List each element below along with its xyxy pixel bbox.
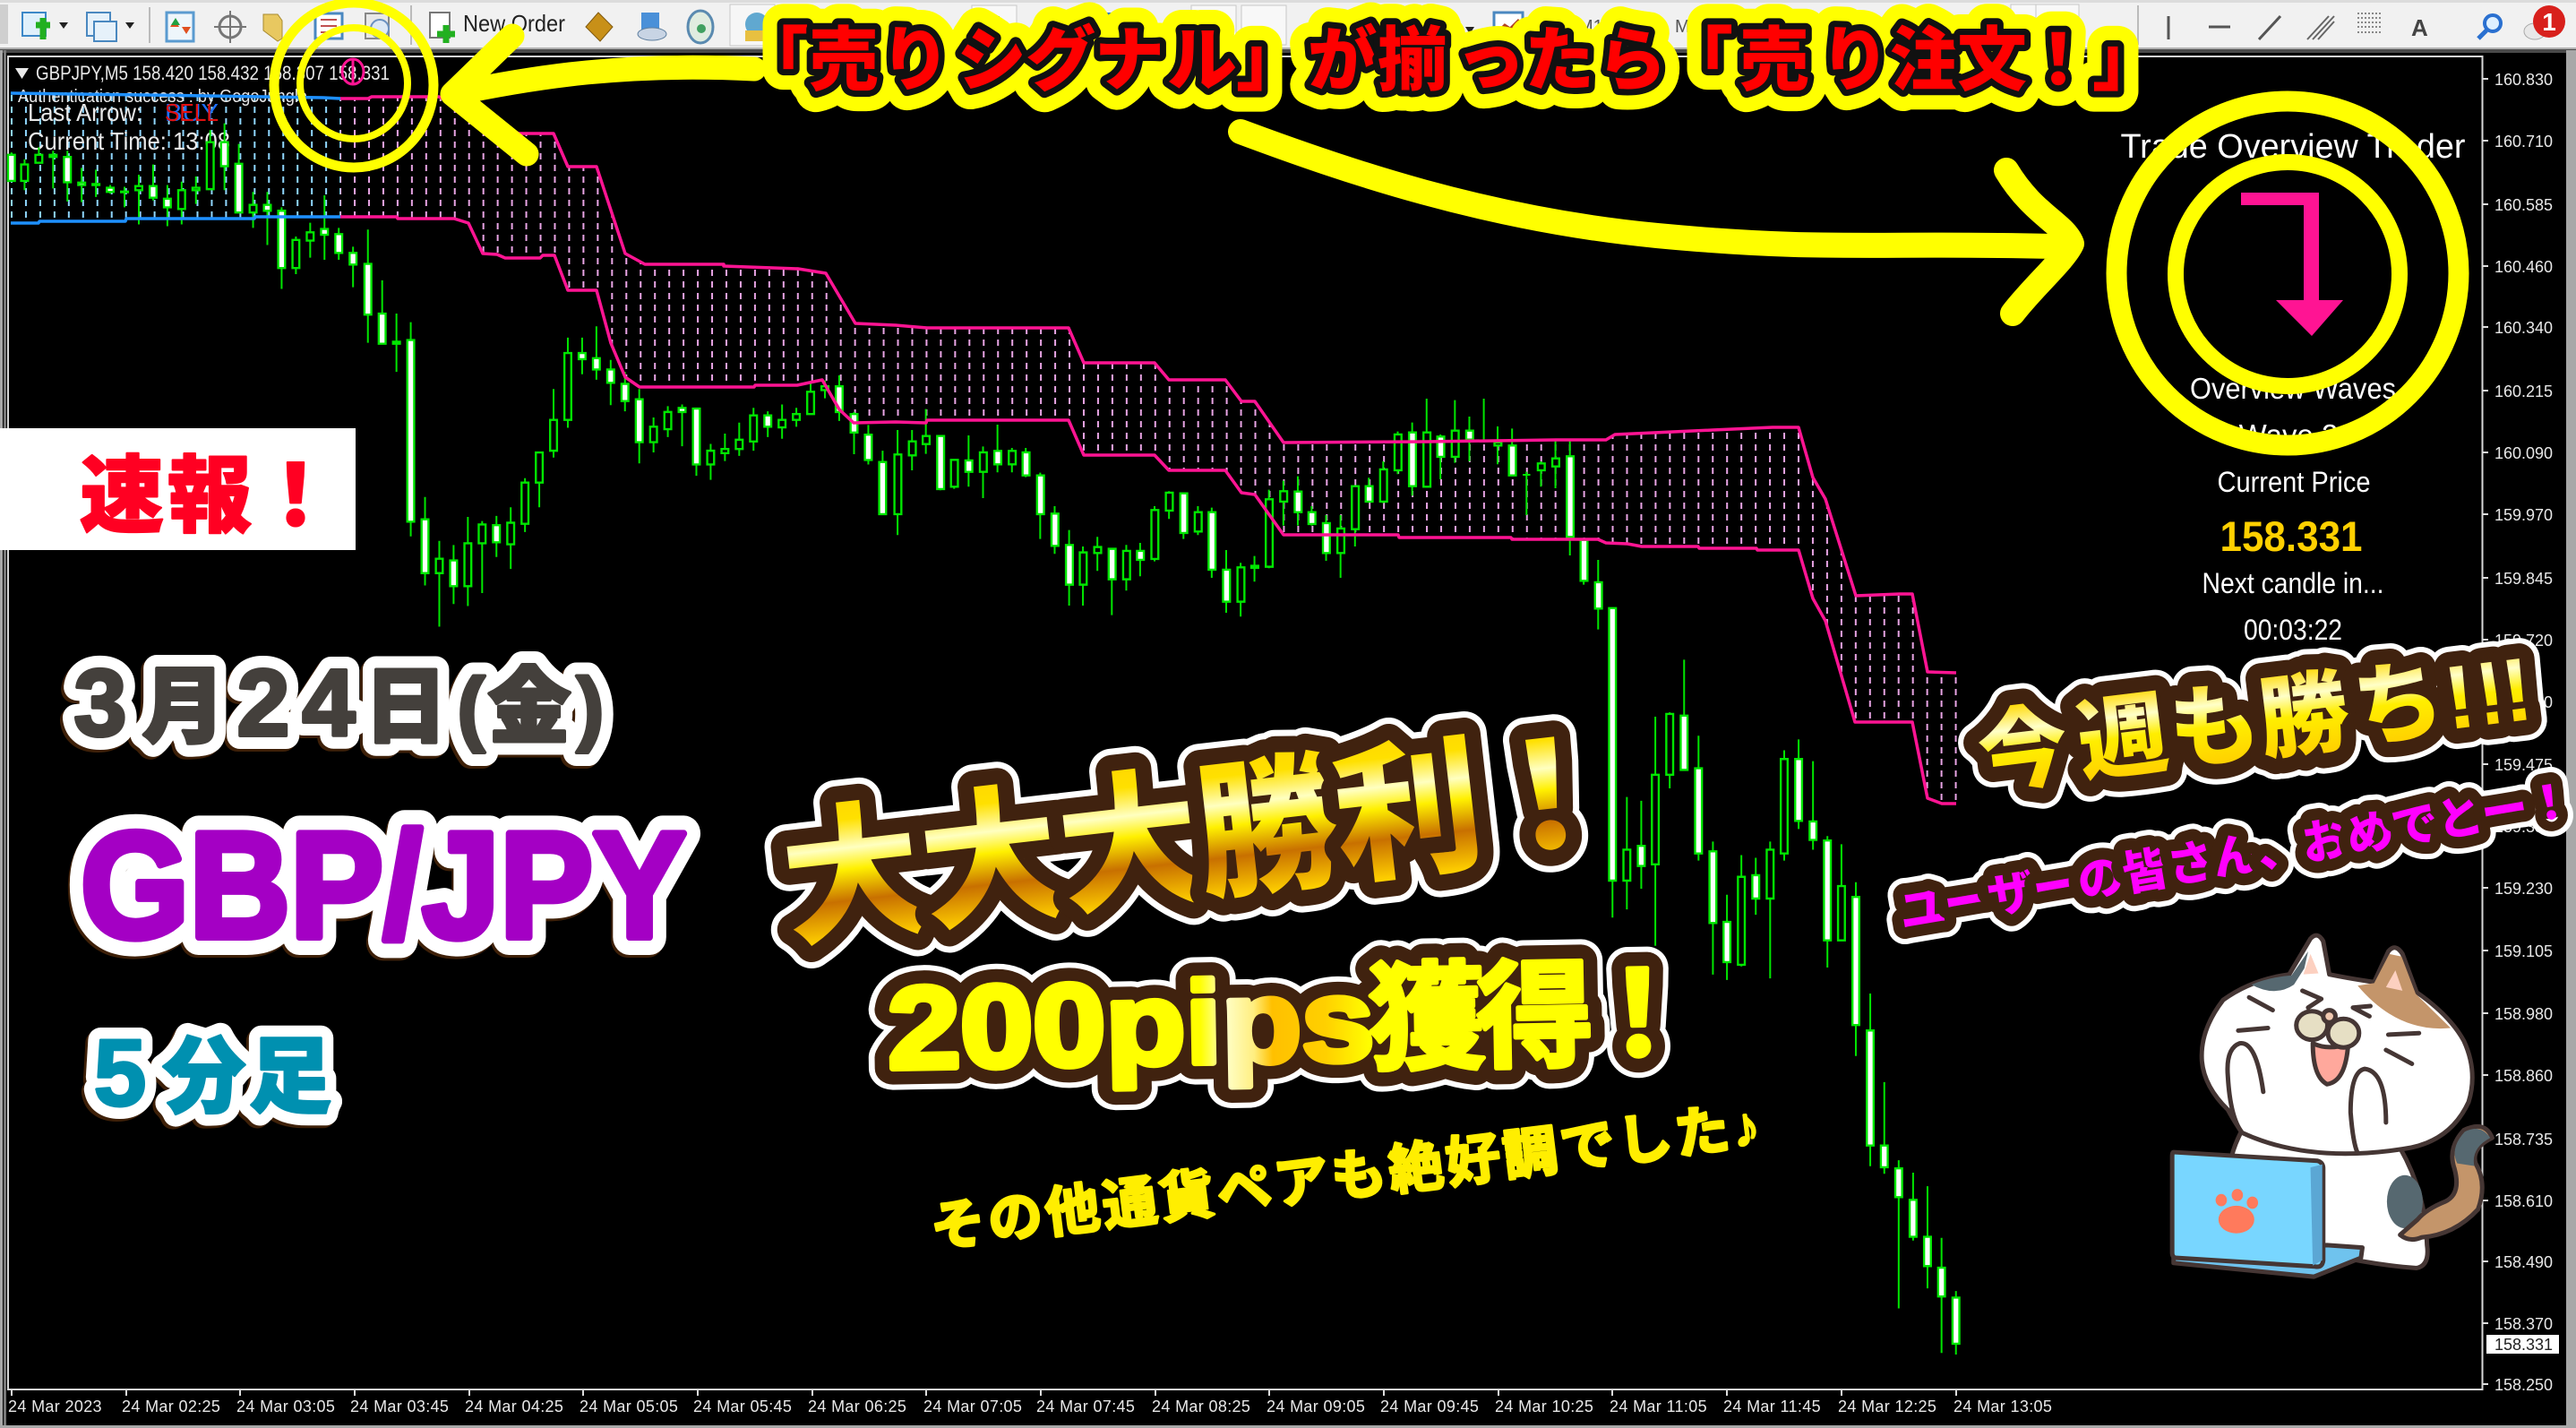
price axis: 159.970 <box>2494 506 2553 524</box>
chart status text <box>15 62 390 155</box>
platform toolbar: M15 <box>1578 17 1613 37</box>
timeframe heading: 5分足 <box>91 1023 329 1129</box>
price axis: 158.735 <box>2494 1131 2553 1148</box>
price axis: 159.230 <box>2494 880 2553 898</box>
price axis: 159.475 <box>2494 756 2553 774</box>
pips headline: 200pips <box>887 954 1375 1094</box>
time axis: 24 Mar 03:45 <box>350 1398 449 1415</box>
date heading: 3月24日(金) <box>74 650 604 756</box>
overview panel text: Wave 2 <box>2239 418 2338 452</box>
big win headline: 大大大勝利！ <box>774 707 1629 966</box>
cat head <box>2202 935 2472 1154</box>
price axis: 160.215 <box>2494 383 2553 400</box>
price axis: 160.340 <box>2494 319 2553 337</box>
price axis: 159.105 <box>2494 942 2553 960</box>
overview panel text: 00:03:22 <box>2244 614 2342 646</box>
arrow to overview panel <box>1241 132 2072 314</box>
price axis: 158.250 <box>2494 1376 2553 1394</box>
time axis: 24 Mar 11:45 <box>1723 1398 1821 1415</box>
overview panel text: Trade Overview Trader <box>2121 128 2466 166</box>
cat face <box>2228 991 2419 1153</box>
breaking news label <box>0 428 356 550</box>
overview panel text <box>2121 128 2466 646</box>
big win headline: 大大大勝利！ <box>774 707 1629 966</box>
this week win headline: 今週も勝ち!!! <box>1972 639 2537 806</box>
time axis: 24 Mar 07:05 <box>923 1398 1022 1415</box>
chart status text: SELL <box>165 99 219 126</box>
price axis: 159.720 <box>2494 632 2553 649</box>
price axis: 158.331 <box>2494 1336 2553 1354</box>
timeframe heading: 5分足 <box>94 1020 331 1126</box>
cat with laptop <box>2172 935 2492 1277</box>
time axis: 24 Mar 06:25 <box>808 1398 906 1415</box>
time axis: 24 Mar 05:05 <box>580 1398 678 1415</box>
other pairs caption: その他通貨ペアも絶好調でした♪ <box>927 1095 1763 1259</box>
time axis: 24 Mar 09:05 <box>1267 1398 1365 1415</box>
price axis <box>2483 71 2559 1394</box>
overview panel text: Current Price <box>2218 466 2370 498</box>
currency pair heading: GBP/JPY <box>81 801 686 969</box>
pink down arrow icon <box>2241 193 2343 336</box>
pips headline: 獲得！ <box>1368 949 1697 1085</box>
price axis: 158.490 <box>2494 1253 2553 1271</box>
chart status text: Current Time: 13:08 <box>28 127 230 155</box>
time axis: 24 Mar 03:05 <box>236 1398 335 1415</box>
time axis: 24 Mar 11:05 <box>1610 1398 1707 1415</box>
pips headline: 200pips <box>887 954 1375 1094</box>
laptop <box>2174 1245 2362 1277</box>
chart status text: BUY <box>165 99 219 126</box>
cat tail <box>2400 1126 2492 1240</box>
price axis: 160.460 <box>2494 258 2553 276</box>
candlesticks <box>8 124 1960 1355</box>
this week win headline: 今週も勝ち!!! <box>1972 639 2537 806</box>
time axis: 24 Mar 10:25 <box>1495 1398 1593 1415</box>
time axis: 24 Mar 05:45 <box>693 1398 792 1415</box>
top headline: 「売りシグナル」が揃ったら「売り注文！」 <box>739 21 2162 99</box>
pips headline: 獲得！ <box>1368 949 1697 1085</box>
platform toolbar: A <box>2411 14 2428 41</box>
overview panel text: Next candle in... <box>2202 567 2384 599</box>
yellow rings around chart signal <box>274 3 434 168</box>
cloud boundary lines <box>11 93 1956 804</box>
price axis: 159.350 <box>2494 818 2553 836</box>
cat body <box>2230 1131 2427 1268</box>
time axis: 24 Mar 13:05 <box>1953 1398 2052 1415</box>
pips headline: 200pips <box>887 954 1375 1094</box>
price axis: 159.600 <box>2494 693 2553 711</box>
price axis: 160.090 <box>2494 444 2553 462</box>
overview panel text: 158.331 <box>2220 512 2363 560</box>
time axis <box>8 1390 2052 1415</box>
price axis: 158.370 <box>2494 1315 2553 1333</box>
sell arrow signal on chart <box>342 59 364 84</box>
platform toolbar: 1 <box>2542 8 2556 36</box>
currency pair heading: GBP/JPY <box>81 801 686 969</box>
breaking news label: 速報！ <box>80 449 338 543</box>
congratulations line: ユーザーの皆さん、おめでとー！ <box>1895 774 2576 940</box>
paw print <box>2216 1189 2258 1234</box>
cloud hatching <box>11 93 1958 804</box>
chart status text: Last Arrow: <box>28 99 142 126</box>
price axis: 158.980 <box>2494 1005 2553 1023</box>
overview panel text: Overview Waves <box>2190 372 2396 405</box>
time axis: 24 Mar 08:25 <box>1152 1398 1250 1415</box>
timeframe heading: 5分足 <box>94 1020 331 1126</box>
New Order button label: New Order <box>463 10 565 37</box>
chart status text: GBPJPY,M5 158.420 158.432 158.307 158.331 <box>36 62 390 84</box>
price axis: 160.710 <box>2494 133 2553 151</box>
time axis: 24 Mar 2023 <box>8 1398 102 1415</box>
currency pair heading: GBP/JPY <box>79 804 684 972</box>
price axis: 159.845 <box>2494 570 2553 588</box>
price axis: 158.610 <box>2494 1192 2553 1210</box>
arrow to chart signal <box>452 36 754 154</box>
date heading: 3月24日(金) <box>72 653 601 759</box>
yellow rings around overview arrow <box>2117 101 2459 445</box>
pips headline <box>887 949 1697 1094</box>
time axis: 24 Mar 02:25 <box>122 1398 220 1415</box>
price axis: 160.830 <box>2494 71 2553 89</box>
platform toolbar: M15 <box>1675 17 1710 37</box>
date heading: 3月24日(金) <box>74 650 604 756</box>
platform toolbar <box>0 0 2576 53</box>
time axis: 24 Mar 07:45 <box>1036 1398 1135 1415</box>
top headline: 「売りシグナル」が揃ったら「売り注文！」 <box>739 21 2162 99</box>
price axis: 160.585 <box>2494 196 2553 214</box>
chart status text: Authentication success : by GogoJungle <box>18 87 307 107</box>
congratulations line: ユーザーの皆さん、おめでとー！ <box>1895 774 2576 940</box>
time axis: 24 Mar 09:45 <box>1380 1398 1479 1415</box>
time axis: 24 Mar 12:25 <box>1838 1398 1936 1415</box>
time axis: 24 Mar 04:25 <box>465 1398 563 1415</box>
pips headline: 獲得！ <box>1368 949 1697 1085</box>
price axis: 158.860 <box>2494 1067 2553 1085</box>
